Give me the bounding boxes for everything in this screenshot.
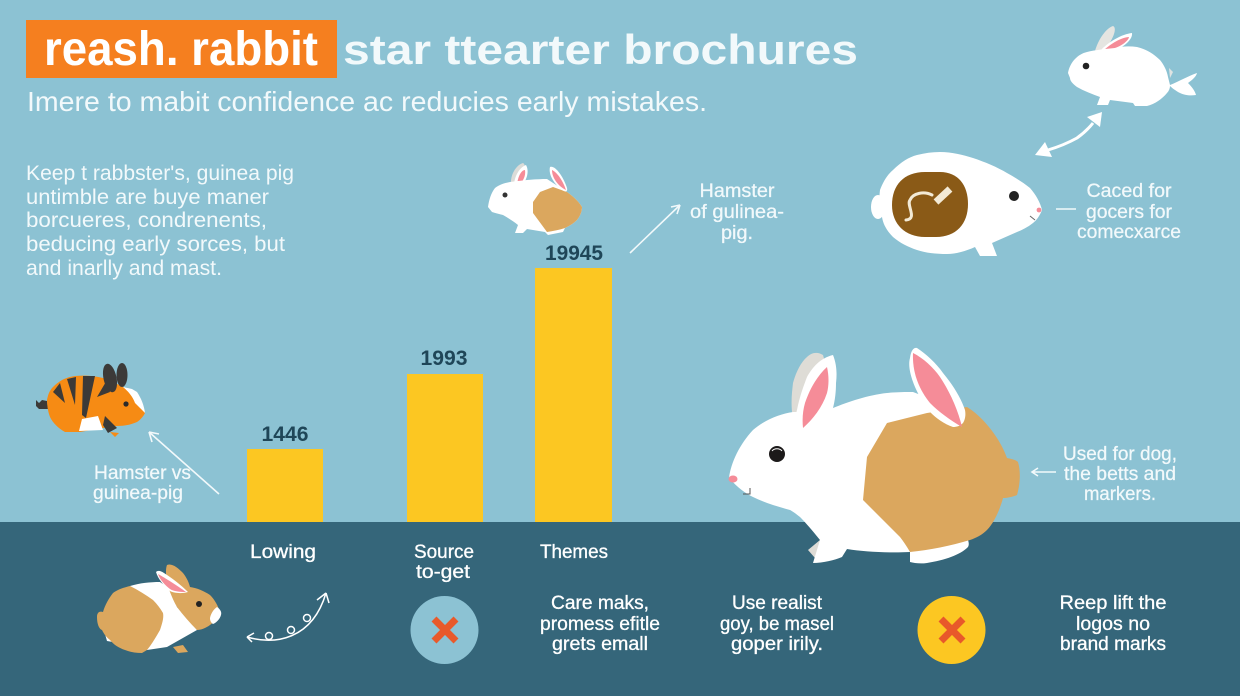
bar: Source to-get: 1993 (420, 347, 468, 370)
bar: Lowing: 1446 (262, 423, 308, 446)
label: Hamster vs guinea-pig (93, 463, 191, 504)
subtitle: Imere to mabit confidence ac reducies early mistakes. (27, 86, 707, 117)
bar: Source to-get: Source (414, 542, 474, 563)
text block: Reep lift the: Reep lift the (1060, 593, 1166, 614)
arrow: double arrow between rabbits (1035, 112, 1102, 157)
text block: Care maks: grets emall (552, 634, 648, 655)
label: Hamster of guinea-pig: pig. (721, 223, 753, 244)
text block: Care maks: promess efitle (540, 614, 660, 635)
icon: blue circle with cross (410, 596, 478, 664)
bar chart (247, 242, 612, 583)
arrow: to Hamster of guinea-pig (630, 205, 680, 253)
label: Hamster of guinea-pig (690, 181, 784, 244)
text block: Use realist (720, 593, 834, 655)
icon: tan and white rabbit (97, 565, 221, 653)
bar: Themes: 19945 (545, 242, 603, 265)
icon: orange striped hamster (36, 362, 145, 437)
title: reash. rabbit (44, 23, 318, 76)
icon: large rabbit with tan patch (728, 348, 1020, 563)
label: Hamster of guinea-pig: of gulinea- (690, 202, 784, 223)
text block: Reep lift the (1060, 593, 1166, 655)
bar: Themes: Themes (540, 542, 608, 563)
title: star ttearter brochures (343, 26, 858, 73)
label: Used for dog, the betts and markers: markers. (1084, 484, 1156, 505)
bar: Themes (535, 242, 612, 563)
icon: white guinea pig with brown patch (871, 152, 1042, 256)
text block: Use realist: Use realist (732, 593, 823, 614)
text block: Reep lift the: brand marks (1060, 634, 1166, 655)
label: Hamster vs guinea-pig: guinea-pig (93, 483, 183, 504)
text block: Care maks (540, 593, 660, 655)
text block: intro: beducing early sorces, but (26, 233, 285, 256)
text block: Use realist: goper irily. (731, 634, 823, 655)
text block: intro: and inarlly and mast. (26, 257, 222, 280)
text block: intro: untimble are buye maner (26, 186, 269, 209)
text block: Reep lift the: logos no (1076, 614, 1150, 635)
icon: white rabbit with fish tail (1068, 26, 1197, 106)
label: Caced for gocers for comecxarce: comecxarce (1077, 222, 1181, 243)
label: Used for dog, the betts and markers: Used for dog, (1063, 444, 1177, 465)
bar: Source to-get (407, 347, 483, 583)
text block: intro (26, 162, 294, 280)
arrow: curly loop arrow (247, 593, 329, 642)
arrow: hamster pointer (149, 432, 219, 494)
label: Caced for gocers for comecxarce (1056, 181, 1181, 243)
label: Hamster of guinea-pig: Hamster (700, 181, 775, 202)
label: Used for dog, the betts and markers: the betts and (1064, 464, 1176, 485)
label: Caced for gocers for comecxarce: Caced for (1086, 181, 1172, 202)
text block: intro: borcueres, condrenents, (26, 209, 267, 232)
label: Hamster vs guinea-pig: Hamster vs (94, 463, 191, 484)
icon: small rabbit over tallest bar (488, 163, 582, 235)
text block: Care maks: Care maks, (551, 593, 649, 614)
bar: Lowing (247, 423, 323, 563)
bar: Lowing: Lowing (250, 542, 316, 563)
label: Used for dog, the betts and markers (1032, 444, 1177, 505)
label: Caced for gocers for comecxarce: gocers for (1086, 202, 1173, 223)
icon: yellow circle with cross (918, 596, 986, 664)
bar: Source to-get: to-get (416, 562, 471, 583)
text block: Use realist: goy, be masel (720, 614, 834, 635)
text block: intro: Keep t rabbster's, guinea pig (26, 162, 294, 185)
title (26, 20, 858, 78)
